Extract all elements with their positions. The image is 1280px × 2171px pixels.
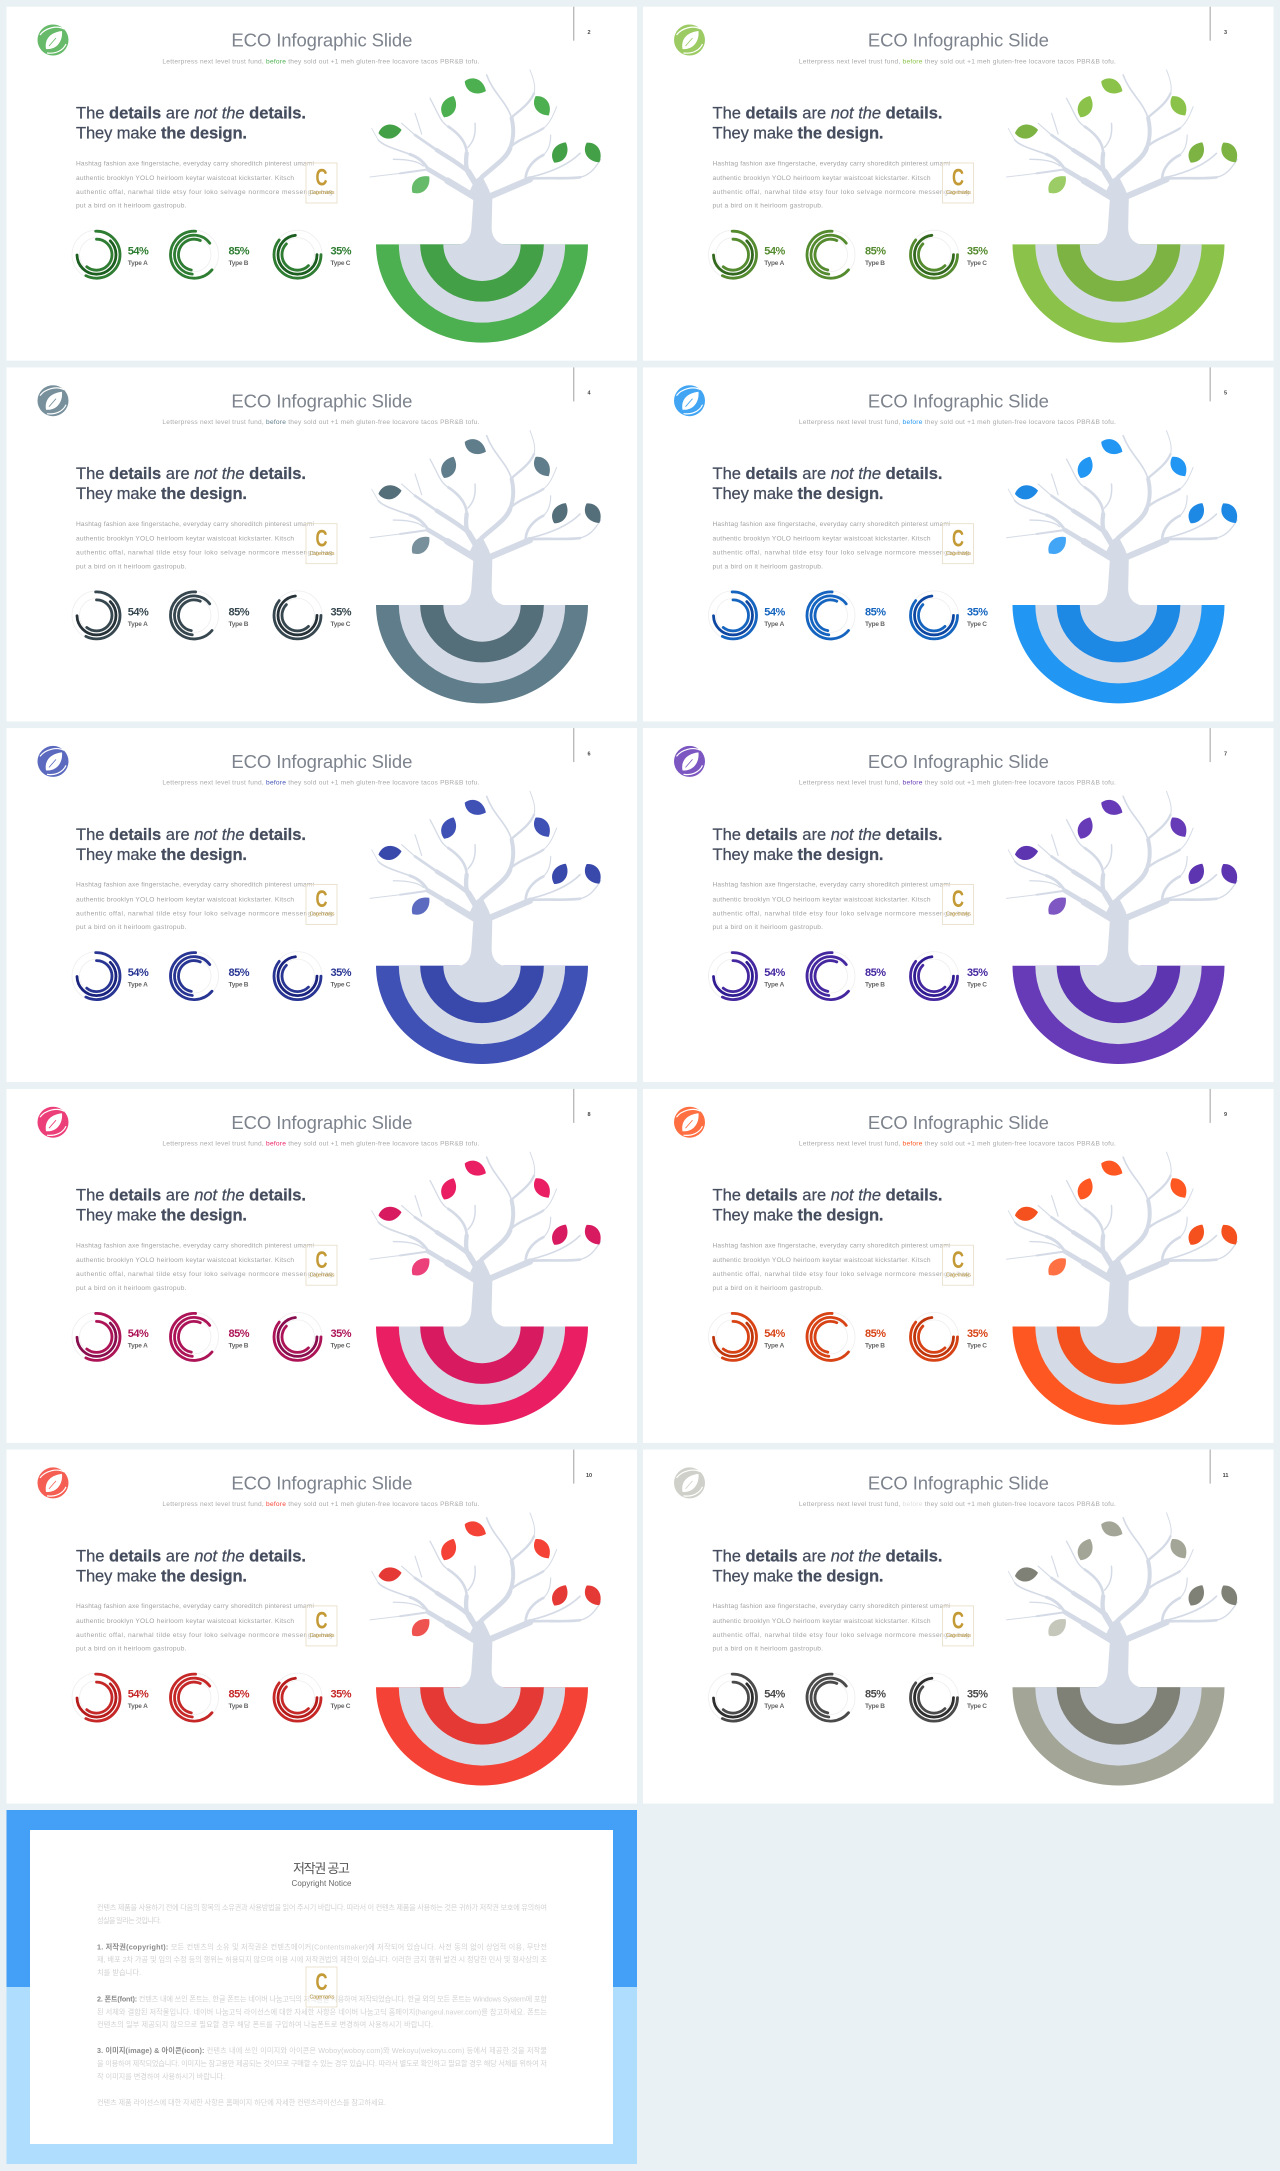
body text: Hashtag fashion axe fingerstache, everyday carry shoreditch pinterest umami — [712, 882, 951, 889]
donut chart: Type B 85% — [161, 943, 250, 1009]
heading: They make the design. — [712, 485, 884, 503]
copyright heading: Copyright Notice — [292, 1879, 352, 1888]
donut chart: Type B 85% — [797, 222, 886, 288]
body text: authentic brooklyn YOLO heirloom keytar waistcoat kickstarter. Kitsch — [76, 896, 294, 903]
donut chart: Type C 35%: Type C — [967, 621, 987, 628]
donut chart: Type B 85%: Type B — [865, 621, 885, 628]
title: ECO Infographic Slide — [868, 751, 1049, 772]
donut chart: Type A 54%: 54% — [128, 246, 149, 258]
heading: They make the design. — [712, 1567, 884, 1585]
donut chart: Type C 35% — [273, 952, 352, 1001]
body text: put a bird on it heirloom gastropub. — [76, 1645, 187, 1652]
donut chart: Type B 85% — [797, 582, 886, 649]
icon: leaf logo — [38, 385, 68, 416]
donut chart: Type A 54% — [69, 949, 149, 1004]
subtitle: Letterpress next level trust fund, before they sold out +1 meh gluten-free locavore tacos PBR&B tofu. — [162, 1141, 480, 1148]
watermark: C — [952, 165, 964, 192]
donut chart: Type C 35%: 35% — [330, 1689, 352, 1701]
watermark — [942, 1245, 974, 1285]
watermark — [942, 163, 974, 203]
donut chart: Type A 54%: 54% — [764, 246, 786, 258]
body text: authentic offal, narwhal tilde etsy four loko selvage normcore messenger bag — [712, 1632, 969, 1639]
heading: They make the design. — [712, 125, 884, 143]
panel: slide 7 purple — [643, 728, 1274, 1082]
copyright item 1: 재, 배포 2차 가공 및 임의 수정 등의 행위는 허용되지 않으며 이용 시에 저작권법의 제한이 있습니다. 이러한 금지 행위 발견 시 정당한 민사 및 형사상의 조 — [97, 1955, 547, 1964]
copyright item 1: 1. 저작권(copyright): 모든 컨텐츠의 소유 및 저작권은 컨텐츠메이커(Contentsmaker)에 저작되어 있습니다. 사전 동의 없이 상업적 이용, 무단전 — [97, 1942, 547, 1952]
panel: slide 10 red — [6, 1450, 637, 1804]
page number — [1210, 728, 1227, 762]
tree with semicircle rings and leaves — [1006, 791, 1242, 1064]
tree with semicircle rings and leaves — [370, 431, 605, 703]
body text: put a bird on it heirloom gastropub. — [712, 924, 823, 931]
donut chart: Type B 85%: Type B — [865, 982, 885, 989]
body text: authentic offal, narwhal tilde etsy four loko selvage normcore messenger bag — [76, 910, 333, 917]
tree with semicircle rings and leaves — [1006, 70, 1242, 343]
body text: authentic offal, narwhal tilde etsy four loko selvage normcore messenger bag — [76, 1632, 333, 1639]
donut chart: Type B 85% — [797, 1664, 886, 1731]
heading: They make the design. — [76, 125, 247, 143]
watermark: C — [952, 1608, 964, 1635]
panel: slide 9 orange — [643, 1089, 1274, 1443]
copyright item 2 — [97, 1994, 547, 2029]
body text: authentic brooklyn YOLO heirloom keytar waistcoat kickstarter. Kitsch — [712, 1257, 931, 1264]
heading — [712, 1547, 942, 1585]
watermark — [306, 163, 337, 203]
donut chart: Type C 35% — [910, 1673, 988, 1722]
body text — [712, 160, 969, 210]
donut chart: Type A 54%: 54% — [128, 606, 149, 618]
tree with semicircle rings and leaves — [1006, 1513, 1242, 1786]
page number — [1210, 367, 1227, 401]
body text: Hashtag fashion axe fingerstache, everyday carry shoreditch pinterest umami — [76, 160, 315, 167]
donut chart: Type C 35% — [273, 230, 352, 279]
watermark — [306, 1606, 337, 1646]
body text: authentic offal, narwhal tilde etsy four loko selvage normcore messenger bag — [712, 910, 969, 917]
donut chart: Type B 85%: Type B — [865, 260, 885, 267]
donut chart: Type A 54% — [69, 1309, 149, 1364]
heading — [76, 465, 306, 503]
watermark: Cagemarks — [946, 190, 971, 196]
page number — [573, 367, 591, 401]
body text — [712, 1603, 969, 1652]
donut chart: Type A 54%: 54% — [128, 967, 149, 979]
copyright closing line: 컨텐츠 제품 라이선스에 대한 자세한 사항은 홈페이지 하단에 자세한 컨텐츠라이선스를 참고하세요. — [97, 2098, 386, 2107]
heading: They make the design. — [76, 846, 247, 864]
heading — [76, 104, 306, 142]
body text: authentic brooklyn YOLO heirloom keytar waistcoat kickstarter. Kitsch — [712, 896, 931, 903]
donut chart: Type A 54%: 54% — [764, 1689, 786, 1701]
body text: authentic offal, narwhal tilde etsy four loko selvage normcore messenger bag — [76, 189, 333, 196]
donut chart: Type A 54% — [705, 588, 786, 643]
donut chart: Type A 54%: Type A — [128, 260, 148, 267]
donut chart: Type A 54%: Type A — [128, 982, 148, 989]
donut chart: Type C 35%: Type C — [967, 1342, 987, 1349]
heading: They make the design. — [76, 1567, 247, 1585]
icon: leaf logo — [674, 1467, 705, 1498]
page number: 9 — [1224, 1112, 1227, 1118]
donut chart: Type C 35% — [910, 1312, 988, 1361]
donut chart: Type A 54% — [705, 949, 786, 1004]
watermark: Cagemarks — [946, 1272, 971, 1278]
body text: put a bird on it heirloom gastropub. — [712, 203, 823, 210]
page number — [1210, 1089, 1227, 1123]
watermark: C — [316, 886, 328, 913]
subtitle: Letterpress next level trust fund, before they sold out +1 meh gluten-free locavore tacos PBR&B tofu. — [162, 1501, 480, 1508]
body text: Hashtag fashion axe fingerstache, everyday carry shoreditch pinterest umami — [76, 521, 315, 528]
donut chart: Type C 35%: 35% — [330, 606, 352, 618]
title: ECO Infographic Slide — [868, 1473, 1049, 1494]
page number — [1210, 1450, 1228, 1484]
subtitle: Letterpress next level trust fund, before they sold out +1 meh gluten-free locavore tacos PBR&B tofu. — [799, 1501, 1116, 1508]
tree with semicircle rings and leaves — [370, 1152, 605, 1425]
page number — [573, 1089, 591, 1123]
donut chart: Type C 35%: Type C — [330, 260, 351, 267]
heading: The details are not the details. — [76, 105, 306, 123]
body text: put a bird on it heirloom gastropub. — [712, 563, 823, 570]
copyright item 2: 컨텐츠의 일부 제공되지 않으므로 필요할 경우 해당 폰트를 구입하여 나눔폰트로 변경하여 사용하시기 바랍니다. — [97, 2020, 433, 2029]
body text: Hashtag fashion axe fingerstache, everyday carry shoreditch pinterest umami — [712, 521, 951, 528]
watermark: C — [316, 1969, 328, 1996]
subtitle: Letterpress next level trust fund, before they sold out +1 meh gluten-free locavore tacos PBR&B tofu. — [162, 58, 480, 65]
donut chart: Type A 54%: Type A — [764, 1703, 785, 1710]
donut chart: Type B 85%: Type B — [228, 1703, 249, 1710]
donut chart: Type C 35%: 35% — [967, 1689, 988, 1701]
donut chart: Type A 54%: Type A — [128, 621, 148, 628]
body text: authentic offal, narwhal tilde etsy four loko selvage normcore messenger bag — [712, 189, 969, 196]
donut chart: Type B 85%: 85% — [228, 606, 250, 618]
tree with semicircle rings and leaves — [1006, 431, 1242, 703]
icon: leaf logo — [38, 1467, 68, 1498]
body text: authentic brooklyn YOLO heirloom keytar waistcoat kickstarter. Kitsch — [76, 1618, 294, 1625]
heading: They make the design. — [712, 1207, 884, 1225]
donut chart: Type C 35%: Type C — [967, 1703, 987, 1710]
donut chart: Type B 85% — [797, 1304, 886, 1370]
donut chart: Type B 85%: 85% — [865, 967, 886, 979]
watermark: Cagemarks — [946, 912, 971, 918]
donut chart: Type C 35% — [910, 591, 988, 640]
panel: slide 2 green — [6, 7, 637, 361]
heading — [712, 465, 942, 503]
heading: The details are not the details. — [712, 1187, 942, 1205]
copyright item 1: 치를 받습니다. — [97, 1968, 141, 1977]
donut chart: Type C 35% — [910, 230, 988, 279]
watermark: C — [316, 525, 328, 552]
donut chart: Type B 85%: 85% — [865, 606, 886, 618]
page number: 2 — [587, 30, 591, 36]
icon: leaf logo — [674, 1107, 705, 1138]
donut chart: Type B 85%: Type B — [865, 1703, 885, 1710]
heading: The details are not the details. — [76, 826, 306, 844]
title: ECO Infographic Slide — [868, 30, 1049, 51]
heading: The details are not the details. — [712, 1547, 942, 1565]
donut chart: Type A 54% — [705, 227, 786, 282]
watermark: C — [952, 1247, 964, 1274]
watermark — [942, 1606, 974, 1646]
body text — [76, 521, 333, 570]
heading: The details are not the details. — [76, 1547, 306, 1565]
donut chart: Type C 35%: 35% — [330, 967, 352, 979]
watermark: C — [316, 1247, 328, 1274]
donut chart: Type B 85%: Type B — [865, 1342, 885, 1349]
body text: authentic brooklyn YOLO heirloom keytar waistcoat kickstarter. Kitsch — [76, 175, 294, 182]
donut chart: Type C 35% — [273, 1312, 352, 1361]
donut chart: Type C 35%: 35% — [967, 246, 988, 258]
watermark — [306, 524, 337, 564]
page number: 10 — [586, 1473, 592, 1479]
donut chart: Type C 35%: Type C — [967, 260, 987, 267]
copyright item 3: 작 이미지를 변경하여 사용하시기 바랍니다. — [97, 2072, 225, 2081]
donut chart: Type C 35%: Type C — [330, 1342, 351, 1349]
body text — [76, 160, 333, 210]
copyright item 1 — [97, 1942, 547, 1977]
body text: authentic offal, narwhal tilde etsy four loko selvage normcore messenger bag — [76, 1271, 333, 1278]
body text — [76, 1603, 333, 1652]
title: ECO Infographic Slide — [231, 1112, 412, 1133]
donut chart: Type B 85% — [161, 1664, 250, 1731]
page number — [573, 728, 591, 762]
donut chart: Type A 54% — [69, 588, 149, 643]
donut chart: Type B 85%: 85% — [228, 967, 250, 979]
watermark: C — [952, 886, 964, 913]
panel: slide 4 blue grey — [6, 367, 637, 721]
heading — [76, 1187, 306, 1225]
heading: They make the design. — [76, 485, 247, 503]
donut chart: Type C 35%: Type C — [330, 982, 351, 989]
watermark: Cagemarks — [310, 912, 335, 918]
donut chart: Type B 85%: 85% — [865, 246, 886, 258]
donut chart: Type C 35% — [910, 952, 988, 1001]
donut chart: Type C 35% — [273, 1673, 352, 1722]
watermark: C — [316, 165, 328, 192]
body text: Hashtag fashion axe fingerstache, everyday carry shoreditch pinterest umami — [76, 882, 315, 889]
icon: leaf logo — [38, 1107, 68, 1138]
title: ECO Infographic Slide — [868, 1112, 1049, 1133]
tree with semicircle rings and leaves — [370, 70, 605, 343]
title: ECO Infographic Slide — [231, 390, 412, 411]
page number — [1210, 7, 1227, 41]
title: ECO Infographic Slide — [868, 390, 1049, 411]
body text: authentic brooklyn YOLO heirloom keytar waistcoat kickstarter. Kitsch — [76, 1257, 294, 1264]
copyright intro: 성실을 알리는 것입니다. — [97, 1916, 161, 1925]
heading: The details are not the details. — [76, 465, 306, 483]
panel: slide 6 indigo — [6, 728, 637, 1082]
body text: put a bird on it heirloom gastropub. — [76, 924, 187, 931]
heading — [76, 1547, 306, 1585]
subtitle: Letterpress next level trust fund, before they sold out +1 meh gluten-free locavore tacos PBR&B tofu. — [162, 419, 480, 426]
heading — [712, 104, 942, 142]
watermark: Cagemarks — [310, 1633, 335, 1639]
icon: leaf logo — [674, 385, 705, 416]
donut chart: Type A 54% — [69, 227, 149, 282]
donut chart: Type A 54% — [705, 1670, 786, 1725]
body text: authentic offal, narwhal tilde etsy four loko selvage normcore messenger bag — [76, 550, 333, 557]
heading — [712, 826, 942, 864]
donut chart: Type A 54% — [69, 1670, 149, 1725]
donut chart: Type B 85% — [797, 943, 886, 1009]
copyright item 2: 2. 폰트(font): 컨텐츠 내에 쓰인 폰트는, 한글 폰트는 네이버 나눔고딕의 저작물을 사용하여 저작되었습니다. 한글 외의 모든 폰트는 Windows System에 포함 — [97, 1994, 547, 2004]
body text — [76, 882, 333, 931]
donut chart: Type C 35%: 35% — [330, 1328, 352, 1340]
copyright item 3: 3. 이미지(image) & 아이콘(icon): 컨텐츠 내에 쓰인 이미지와 아이콘은 Woboy(woboy.com)와 Wekoyu(wekoyu.com) 등에서 제공한 것을 저작물 — [97, 2046, 547, 2055]
donut chart: Type A 54%: Type A — [764, 621, 785, 628]
donut chart: Type C 35%: Type C — [330, 1703, 351, 1710]
body text: Hashtag fashion axe fingerstache, everyday carry shoreditch pinterest umami — [76, 1603, 315, 1610]
body text: authentic brooklyn YOLO heirloom keytar waistcoat kickstarter. Kitsch — [712, 1618, 931, 1625]
copyright intro — [97, 1903, 547, 1925]
copyright intro: 컨텐츠 제품을 사용하기 전에 다음의 항목의 소유권과 사용방법을 읽어 주시기 바랍니다. 따라서 이 컨텐츠 제품을 사용하는 것은 귀하가 저작권 보호에 유의하여 — [97, 1903, 547, 1912]
donut chart: Type C 35% — [273, 591, 352, 640]
copyright heading: 저작권 공고 — [293, 1861, 350, 1876]
heading: The details are not the details. — [76, 1187, 306, 1205]
panel: slide 5 blue — [643, 367, 1274, 721]
panel: slide 3 light green — [643, 7, 1274, 361]
page number: 3 — [1224, 30, 1227, 36]
donut chart: Type B 85% — [161, 222, 250, 288]
donut chart: Type B 85%: 85% — [228, 1328, 250, 1340]
donut chart: Type B 85%: Type B — [228, 1342, 249, 1349]
body text — [712, 1242, 969, 1292]
subtitle: Letterpress next level trust fund, before they sold out +1 meh gluten-free locavore tacos PBR&B tofu. — [799, 58, 1116, 65]
heading: They make the design. — [76, 1207, 247, 1225]
page number: 7 — [1224, 751, 1227, 757]
tree with semicircle rings and leaves — [370, 1513, 605, 1786]
page number — [573, 1450, 592, 1484]
donut chart: Type A 54%: 54% — [764, 967, 786, 979]
copyright item 2: 된 서체와 결합된 저작물입니다. 네이버 나눔고딕 라이선스에 대한 자세한 사항은 네이버 나눔고딕 홈페이지(hangeul.naver.com)를 참고하세요. 폰트는 — [97, 2008, 547, 2016]
title: ECO Infographic Slide — [231, 751, 412, 772]
subtitle: Letterpress next level trust fund, before they sold out +1 meh gluten-free locavore tacos PBR&B tofu. — [799, 780, 1116, 787]
heading — [76, 826, 306, 864]
copyright item 3 — [97, 2046, 547, 2081]
watermark: Cagemarks — [310, 1272, 335, 1278]
body text: authentic offal, narwhal tilde etsy four loko selvage normcore messenger bag — [712, 1271, 969, 1278]
donut chart: Type A 54%: 54% — [128, 1328, 149, 1340]
subtitle: Letterpress next level trust fund, before they sold out +1 meh gluten-free locavore tacos PBR&B tofu. — [162, 780, 480, 787]
body text: put a bird on it heirloom gastropub. — [76, 563, 187, 570]
heading: The details are not the details. — [712, 105, 942, 123]
page number — [573, 7, 591, 41]
page number: 11 — [1223, 1473, 1228, 1479]
body text: Hashtag fashion axe fingerstache, everyday carry shoreditch pinterest umami — [712, 1243, 951, 1250]
body text: Hashtag fashion axe fingerstache, everyday carry shoreditch pinterest umami — [712, 160, 951, 167]
donut chart: Type C 35%: 35% — [967, 967, 988, 979]
body text: authentic brooklyn YOLO heirloom keytar waistcoat kickstarter. Kitsch — [712, 536, 931, 543]
watermark: Cagemarks — [946, 551, 971, 557]
body text: put a bird on it heirloom gastropub. — [712, 1285, 823, 1292]
donut chart: Type A 54%: Type A — [128, 1703, 148, 1710]
watermark: Cagemarks — [310, 1994, 335, 2000]
body text: Hashtag fashion axe fingerstache, everyday carry shoreditch pinterest umami — [712, 1603, 951, 1610]
watermark — [942, 884, 974, 924]
donut chart: Type B 85%: 85% — [865, 1689, 886, 1701]
title: ECO Infographic Slide — [231, 1473, 412, 1494]
body text: authentic brooklyn YOLO heirloom keytar waistcoat kickstarter. Kitsch — [712, 175, 931, 182]
watermark — [306, 884, 337, 924]
donut chart: Type A 54% — [705, 1309, 786, 1364]
page number: 5 — [1224, 391, 1227, 397]
icon: leaf logo — [38, 24, 68, 56]
donut chart: Type A 54%: Type A — [764, 260, 785, 267]
copyright item 3: 을 이용하여 제작되었습니다. 이미지는 참고용만 제공되는 것이므로 구매할 수 있는 경우 있습니다. 따라서 별도로 확인하고 필요할 경우 해당 서체를 위하여 저 — [97, 2059, 547, 2068]
panel: copyright notice — [6, 1810, 637, 2164]
subtitle: Letterpress next level trust fund, before they sold out +1 meh gluten-free locavore tacos PBR&B tofu. — [799, 419, 1116, 426]
watermark: Cagemarks — [946, 1633, 971, 1639]
page number: 4 — [587, 391, 591, 397]
donut chart: Type B 85%: 85% — [228, 246, 250, 258]
icon: leaf logo — [38, 746, 68, 777]
donut chart: Type A 54%: Type A — [128, 1342, 148, 1349]
panel: slide 8 pink — [6, 1089, 637, 1443]
donut chart: Type B 85%: Type B — [228, 982, 249, 989]
donut chart: Type C 35%: Type C — [967, 982, 987, 989]
watermark — [942, 524, 974, 564]
tree with semicircle rings and leaves — [1006, 1152, 1242, 1425]
panel: slide 11 grey — [643, 1450, 1274, 1804]
donut chart: Type A 54%: Type A — [764, 1342, 785, 1349]
donut chart: Type B 85%: Type B — [228, 621, 249, 628]
donut chart: Type C 35%: Type C — [330, 621, 351, 628]
copyright heading — [292, 1861, 352, 1888]
page number: 8 — [587, 1112, 591, 1118]
page number: 6 — [587, 751, 591, 757]
body text: authentic offal, narwhal tilde etsy four loko selvage normcore messenger bag — [712, 550, 969, 557]
donut chart: Type B 85% — [161, 1304, 250, 1370]
donut chart: Type A 54%: 54% — [128, 1689, 149, 1701]
subtitle: Letterpress next level trust fund, before they sold out +1 meh gluten-free locavore tacos PBR&B tofu. — [799, 1141, 1116, 1148]
heading — [712, 1187, 942, 1225]
body text — [712, 882, 969, 931]
donut chart: Type B 85% — [161, 582, 250, 649]
watermark: C — [316, 1608, 328, 1635]
watermark — [306, 1245, 337, 1285]
body text — [712, 521, 969, 570]
donut chart: Type A 54%: 54% — [764, 1328, 786, 1340]
donut chart: Type C 35%: 35% — [330, 246, 352, 258]
title: ECO Infographic Slide — [231, 30, 412, 51]
watermark: C — [952, 525, 964, 552]
donut chart: Type B 85%: Type B — [228, 260, 249, 267]
body text: authentic brooklyn YOLO heirloom keytar waistcoat kickstarter. Kitsch — [76, 536, 294, 543]
body text: put a bird on it heirloom gastropub. — [712, 1645, 823, 1652]
body text — [76, 1242, 333, 1292]
icon: leaf logo — [674, 24, 705, 56]
donut chart: Type B 85%: 85% — [228, 1689, 250, 1701]
donut chart: Type A 54%: Type A — [764, 982, 785, 989]
heading: The details are not the details. — [712, 826, 942, 844]
body text: put a bird on it heirloom gastropub. — [76, 203, 187, 210]
donut chart: Type C 35%: 35% — [967, 1328, 988, 1340]
donut chart: Type B 85%: 85% — [865, 1328, 886, 1340]
watermark: Cagemarks — [310, 190, 335, 196]
watermark — [306, 1967, 337, 2007]
icon: leaf logo — [674, 746, 705, 777]
tree with semicircle rings and leaves — [370, 791, 605, 1064]
body text: put a bird on it heirloom gastropub. — [76, 1285, 187, 1292]
heading: The details are not the details. — [712, 465, 942, 483]
body text: Hashtag fashion axe fingerstache, everyday carry shoreditch pinterest umami — [76, 1243, 315, 1250]
heading: They make the design. — [712, 846, 884, 864]
donut chart: Type C 35%: 35% — [967, 606, 988, 618]
donut chart: Type A 54%: 54% — [764, 606, 786, 618]
watermark: Cagemarks — [310, 551, 335, 557]
